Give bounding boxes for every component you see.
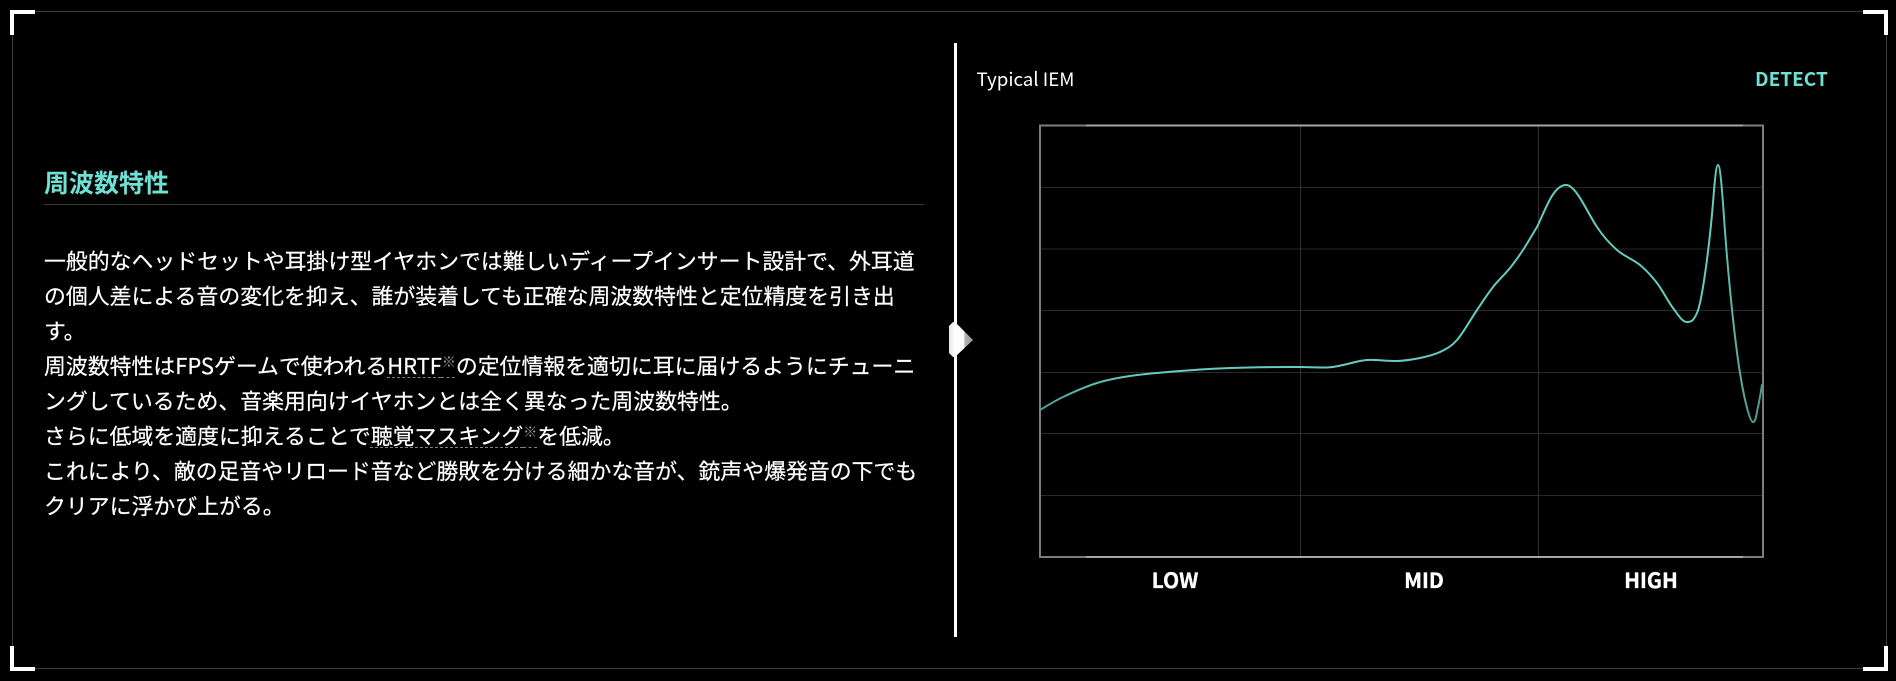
axis label: LOW: LOW [1152, 565, 1198, 595]
chart title: Typical IEM: Typical IEM [976, 65, 1074, 92]
body text: これにより、敵の足音やリロード音など勝敗を分ける細かな音が、銃声や爆発音の下でも [44, 455, 917, 486]
heading: 周波数特性 [44, 164, 169, 200]
panel: explanatory text [44, 164, 924, 521]
body text: クリアに浮かび上がる。 [44, 490, 285, 521]
body text: 一般的なヘッドセットや耳掛け型イヤホンでは難しいディープインサート設計で、外耳道 [44, 245, 915, 276]
vertical divider with handle [949, 43, 973, 637]
body text: す。 [44, 315, 86, 346]
body text [44, 245, 917, 521]
body text: ングしているため、音楽用向けイヤホンとは全く異なった周波数特性。 [44, 385, 743, 416]
heading rule [44, 204, 924, 205]
frequency response chart [1039, 124, 1764, 558]
chart status: DETECT: DETECT [1755, 65, 1828, 92]
frequency curve [1040, 165, 1762, 422]
body text: さらに低域を適度に抑えることで聴覚マスキング※を低減。 [44, 420, 625, 451]
axis label: HIGH: HIGH [1624, 565, 1678, 595]
body text: 周波数特性はFPSゲームで使われるHRTF※の定位情報を適切に耳に届けるようにチューニ [44, 350, 915, 381]
body text: の個人差による音の変化を抑え、誰が装着しても正確な周波数特性と定位精度を引き出 [44, 280, 895, 311]
axis label: MID: MID [1404, 565, 1444, 595]
